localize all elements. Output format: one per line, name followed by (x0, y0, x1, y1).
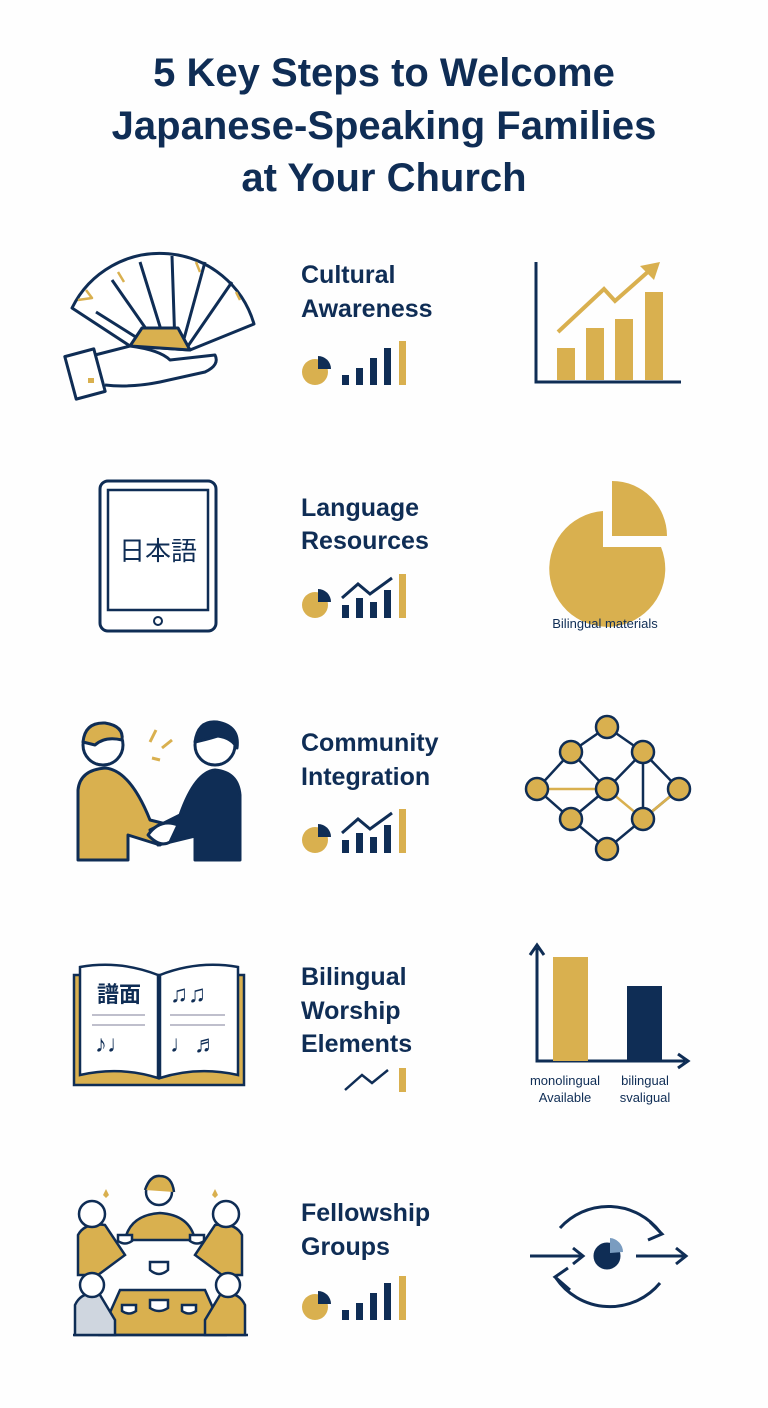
heading: Worship (301, 997, 401, 1025)
chart: bars (530, 945, 688, 1105)
mini icons (302, 341, 406, 385)
heading: Awareness (301, 295, 433, 323)
icon: open book: 譜面 (97, 982, 141, 1007)
chart: bars: svaligual (620, 1090, 670, 1105)
icon: open book: ♫♫ (170, 981, 206, 1008)
chart: bars: Available (539, 1090, 591, 1105)
title (112, 51, 656, 200)
icon: tablet: 日本語 (119, 536, 197, 566)
title: Japanese-Speaking Families (112, 104, 656, 148)
icon: group table (73, 1176, 248, 1335)
heading (301, 963, 412, 1058)
mini icon (345, 1068, 406, 1092)
heading: Groups (301, 1233, 390, 1261)
heading: Cultural (301, 261, 395, 289)
icon: handshake (78, 722, 240, 860)
heading (301, 1199, 430, 1261)
chart: bars: monolingual (530, 1073, 600, 1088)
section 3: community integration (78, 716, 690, 860)
icon: cycle arrows (530, 1206, 686, 1307)
mini icons (302, 1276, 406, 1320)
section 4: bilingual worship (74, 945, 688, 1105)
icon: fan and hand (65, 253, 254, 399)
mini icons (302, 809, 406, 853)
heading: Language (301, 494, 419, 522)
heading (301, 729, 439, 791)
heading (301, 494, 429, 555)
title: at Your Church (241, 156, 527, 200)
icon: open book (74, 965, 244, 1085)
section 2: language resources (100, 481, 667, 631)
heading: Resources (301, 527, 429, 555)
title: 5 Key Steps to Welcome (153, 51, 615, 95)
icon: open book: ♪♩ (95, 1031, 131, 1058)
chart: pie (549, 481, 667, 631)
icon: tablet (100, 481, 216, 631)
heading: Integration (301, 763, 430, 791)
mini icons (302, 574, 406, 618)
chart: network (526, 716, 690, 860)
heading: Community (301, 729, 439, 757)
heading: Fellowship (301, 1199, 430, 1227)
chart: rising bars (536, 262, 681, 382)
heading (301, 261, 433, 323)
chart: pie: Bilingual materials (552, 616, 658, 631)
section 1: cultural awareness (65, 253, 681, 399)
chart: bars: bilingual (621, 1073, 669, 1088)
heading: Elements (301, 1030, 412, 1058)
heading: Bilingual (301, 963, 407, 991)
icon: open book: ♩♬ (170, 1031, 218, 1058)
section 5: fellowship groups (73, 1176, 686, 1335)
